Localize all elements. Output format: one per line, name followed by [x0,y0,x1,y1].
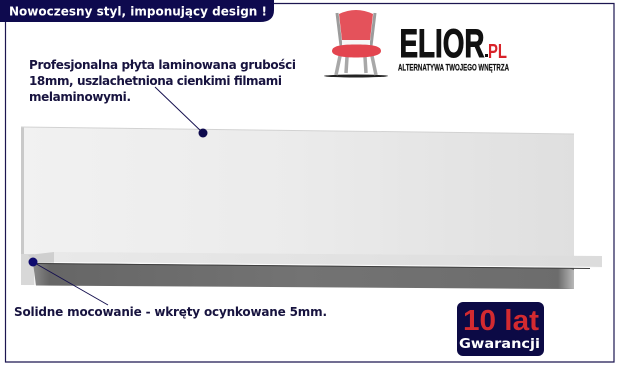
callout text: screws: Solidne mocowanie - wkręty ocynkowane 5mm. [14,305,327,319]
logo dot [485,54,488,57]
logo suffix: PL [488,41,507,63]
callout text: laminated board [29,58,296,104]
logo wordmark: ELIOR [400,22,485,66]
shelf bracket [28,252,54,263]
icon: red chair [324,10,388,78]
callout marker: board [155,87,208,138]
logo: Elior.pl [324,10,509,78]
header banner [0,0,274,22]
callout text: laminated board: Profesjonalna płyta laminowana grubości [29,58,296,72]
shelf underside shadow [33,263,574,289]
logo tagline: ALTERNATYWA TWOJEGO WNĘTRZA [398,62,509,72]
callout text: laminated board: 18mm, uszlachetniona cienkimi filmami [29,74,282,88]
callout text: laminated board: melaminowymi. [29,90,131,104]
warranty badge [457,302,544,356]
shelf illustration [21,127,602,289]
warranty years: 10 lat [463,305,539,337]
callout marker: screws [28,258,108,305]
shelf back panel [21,127,574,289]
shelf board [54,252,602,267]
header banner: Nowoczesny styl, imponujący design ! [9,4,267,18]
warranty label: Gwarancji [459,336,540,352]
